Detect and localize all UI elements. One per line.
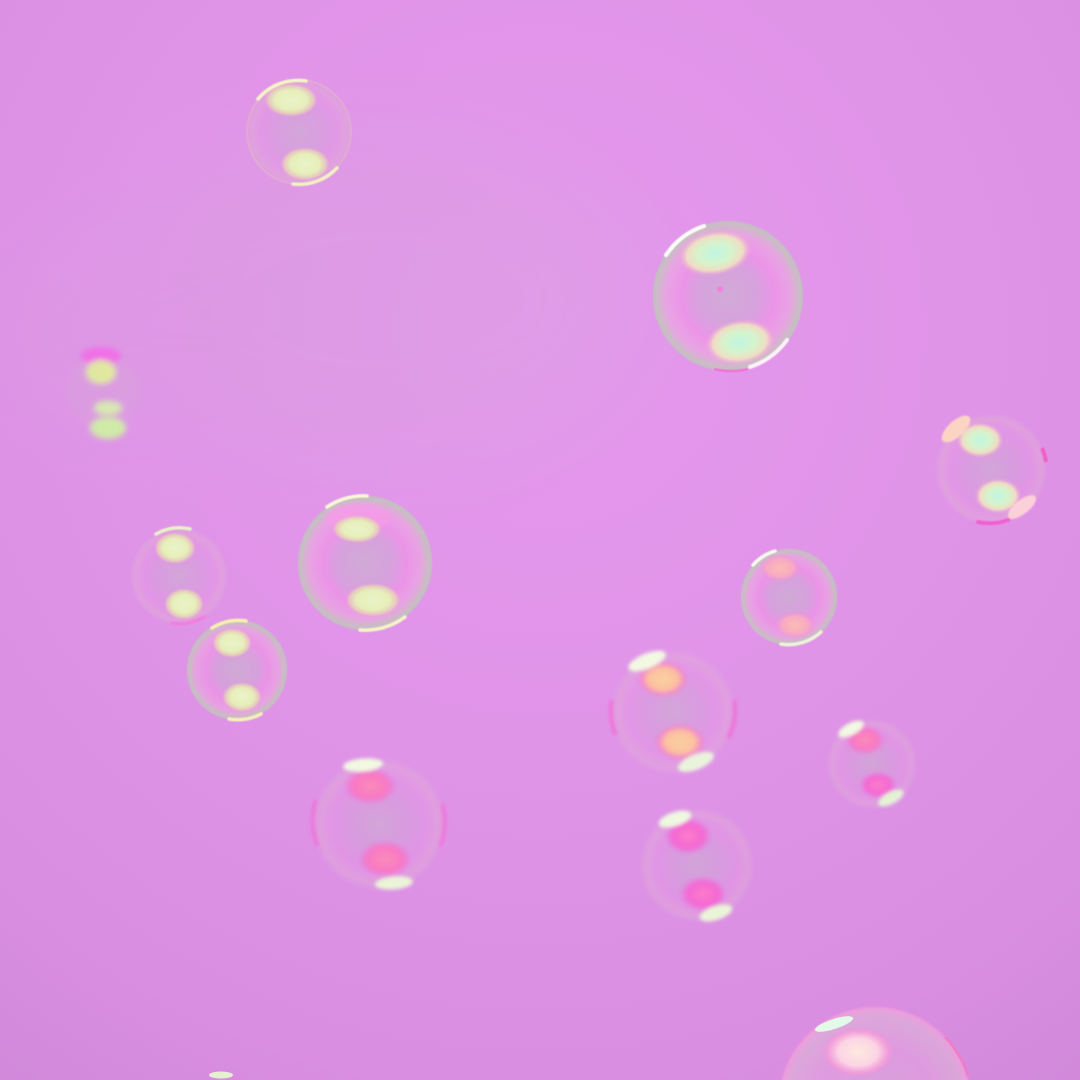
bubble 2 (653, 221, 803, 371)
bubble 9 (611, 647, 735, 776)
bubble 7 (187, 620, 287, 720)
bubble 4 (936, 411, 1046, 524)
bubble 10 (828, 717, 916, 810)
bubble 8 (741, 549, 837, 645)
bubble 14 (cropped at bottom edge) (209, 1072, 233, 1078)
bubble 5 (298, 496, 432, 630)
bubble 3 (out of focus) (66, 347, 140, 439)
bubble 6 (131, 528, 227, 624)
bubble 11 (313, 757, 445, 891)
bubble 1 (247, 80, 351, 184)
bubble 13 (cropped at bottom edge) (781, 1006, 969, 1080)
bubble 12 (641, 807, 753, 925)
background haze (0, 130, 650, 470)
